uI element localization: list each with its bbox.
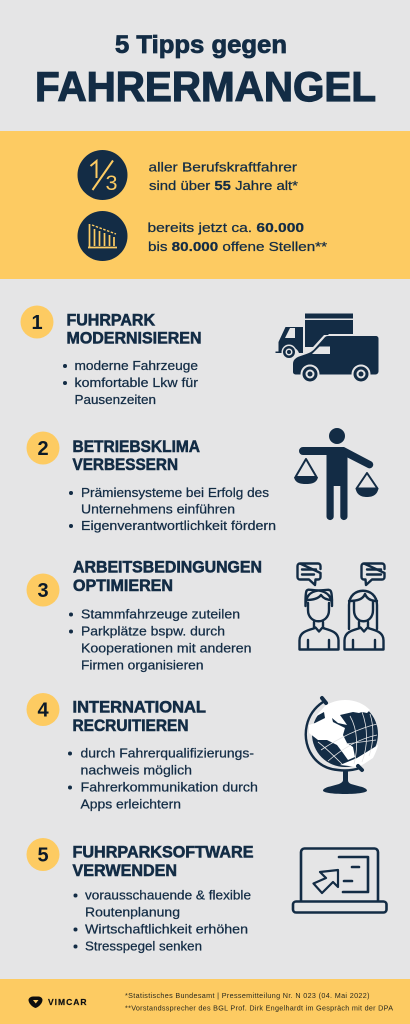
bullet list: Fahrerkommunikation durch <box>80 780 258 794</box>
panel: statistics band <box>0 131 410 279</box>
number badge 1: 1 <box>31 312 43 334</box>
bullet list: Kooperationen mit anderen <box>81 640 252 656</box>
bullet list: moderne Fahrzeuge <box>74 358 198 373</box>
bullet list: Parkplätze bspw. durch <box>81 624 225 638</box>
number badge 2 <box>26 432 60 464</box>
heading: Fuhrpark modernisieren: FUHRPARK <box>66 310 156 330</box>
number badge 4 <box>26 693 60 726</box>
bullet list: Firmen organisieren <box>81 658 204 672</box>
icon: laptop with arrow <box>293 848 386 912</box>
bullet list: Stresspegel senken <box>85 938 202 954</box>
number badge 3 <box>26 574 60 606</box>
footnotes: *Statistisches Bundesamt | Pressemitteilung Nr. N 023 (04. Mai 2022) <box>125 991 370 1000</box>
number badge 3: 3 <box>37 580 49 602</box>
panel: footer <box>0 979 410 1024</box>
heading: Arbeitsbedingungen optimieren: OPTIMIEREN <box>73 576 173 595</box>
heading: Fuhrpark modernisieren <box>66 310 202 348</box>
icon: one third <box>78 150 128 200</box>
bullet list: Wirtschaftlichkeit erhöhen <box>85 922 248 936</box>
heading: International recruitieren <box>72 698 206 735</box>
bullet list <box>74 888 251 954</box>
heading: Arbeitsbedingungen optimieren <box>73 558 262 595</box>
icon: one third: 3 <box>106 172 118 195</box>
heading: Betriebsklima verbessern <box>72 437 200 474</box>
bullet list <box>69 606 252 672</box>
bullet list: Prämiensysteme bei Erfolg des <box>81 485 270 500</box>
icon: globe <box>306 698 378 794</box>
heading: Fuhrparksoftware verwenden <box>72 842 254 880</box>
icon: declining bar chart <box>78 211 128 261</box>
icon: two people with speech bubbles <box>298 564 384 650</box>
logo: Vimcar: VIMCAR <box>48 997 86 1007</box>
stat text: open positions: bis 80.000 offene Stellen** <box>148 239 327 254</box>
number badge 5 <box>26 838 60 871</box>
stat text: open positions <box>148 220 327 254</box>
bullet list: komfortable Lkw für <box>74 375 199 390</box>
bullet list <box>68 746 258 812</box>
footnotes <box>125 991 393 1012</box>
bullet list: Apps erleichtern <box>80 796 181 812</box>
bullet list: Pausenzeiten <box>74 392 156 407</box>
icon: truck and van <box>276 314 378 384</box>
panel: tip 5 <box>26 838 386 954</box>
panel: tip 2 <box>26 428 378 533</box>
bullet list: nachweis möglich <box>80 762 192 778</box>
number badge 2: 2 <box>37 438 49 460</box>
number badge 4: 4 <box>37 700 49 722</box>
bullet list: Unternehmens einführen <box>81 502 235 516</box>
heading: Betriebsklima verbessern: BETRIEBSKLIMA <box>72 437 200 456</box>
heading: International recruitieren: RECRUITIEREN <box>72 716 188 735</box>
panel: tip 1 <box>20 306 378 407</box>
heading: Fuhrparksoftware verwenden: VERWENDEN <box>72 861 177 880</box>
heading: International recruitieren: INTERNATIONAL <box>72 698 206 716</box>
stat text: age: aller Berufskraftfahrer <box>148 160 298 174</box>
stat text: age <box>148 160 298 193</box>
bullet list: Routenplanung <box>85 904 180 920</box>
heading: Fuhrparksoftware verwenden: FUHRPARKSOFTWARE <box>72 842 254 862</box>
title: 5 Tipps gegen: 5 Tipps gegen <box>115 31 287 59</box>
title: Fahrermangel: FAHRERMANGEL <box>35 63 376 110</box>
stat text: age: sind über 55 Jahre alt* <box>149 178 298 193</box>
bullet list: vorausschauende & flexible <box>85 888 251 902</box>
bullet list: durch Fahrerqualifizierungs- <box>80 746 254 760</box>
heading: Arbeitsbedingungen optimieren: ARBEITSBEDINGUNGEN <box>73 558 262 576</box>
bullet list: Stammfahrzeuge zuteilen <box>81 606 240 622</box>
bullet list <box>69 485 276 533</box>
logo: Vimcar <box>28 996 86 1008</box>
number badge 1 <box>20 306 54 338</box>
footnotes: **Vorstandssprecher des BGL Prof. Dirk Engelhardt im Gespräch mit der DPA <box>125 1004 393 1012</box>
bullet list: Eigenverantwortlichkeit fördern <box>81 518 276 533</box>
icon: person holding scales <box>294 428 378 520</box>
panel: tip 3 <box>26 558 384 672</box>
number badge 5: 5 <box>37 844 49 866</box>
panel: tip 4 <box>26 693 378 812</box>
heading: Fuhrpark modernisieren: MODERNISIEREN <box>66 328 202 348</box>
bullet list <box>63 358 199 407</box>
stat text: open positions: bereits jetzt ca. 60.000 <box>148 220 304 235</box>
heading: Betriebsklima verbessern: VERBESSERN <box>72 455 178 474</box>
